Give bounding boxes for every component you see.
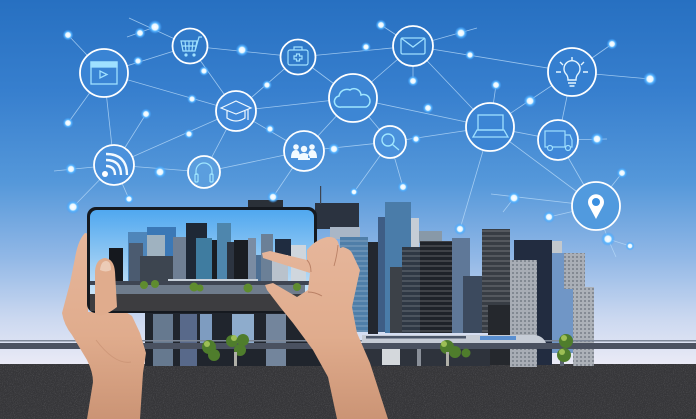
icon: light bulb xyxy=(548,48,596,96)
smartphone showing augmented city xyxy=(87,207,317,313)
phone screen buildings xyxy=(109,223,306,284)
phone screen trees xyxy=(140,280,301,292)
icon: delivery truck xyxy=(538,120,578,160)
ground xyxy=(0,364,696,419)
icon: location pin xyxy=(572,182,620,230)
icon: laptop xyxy=(466,103,514,151)
thumbnail nail xyxy=(100,261,111,272)
icon: cloud xyxy=(329,74,377,122)
icon: video player xyxy=(80,49,128,97)
icon: magnifying glass xyxy=(374,126,406,158)
icon: wifi signal xyxy=(94,145,134,185)
icon: graduation cap xyxy=(216,91,256,131)
left hand rear fingers and palm xyxy=(62,233,146,419)
right hand pinching screen xyxy=(262,237,388,419)
network connection lines xyxy=(54,18,650,257)
city skyline xyxy=(145,186,594,367)
icon: shopping cart xyxy=(172,28,208,64)
icon: envelope xyxy=(393,26,433,66)
train xyxy=(362,335,546,343)
icon: medical kit xyxy=(280,40,316,74)
icon: group of people xyxy=(284,131,324,171)
trees xyxy=(202,334,573,366)
left hand thumb xyxy=(95,258,117,315)
network glowing dots xyxy=(62,20,657,250)
elevated railway bridge xyxy=(0,340,696,366)
icon: headphones xyxy=(188,156,220,188)
